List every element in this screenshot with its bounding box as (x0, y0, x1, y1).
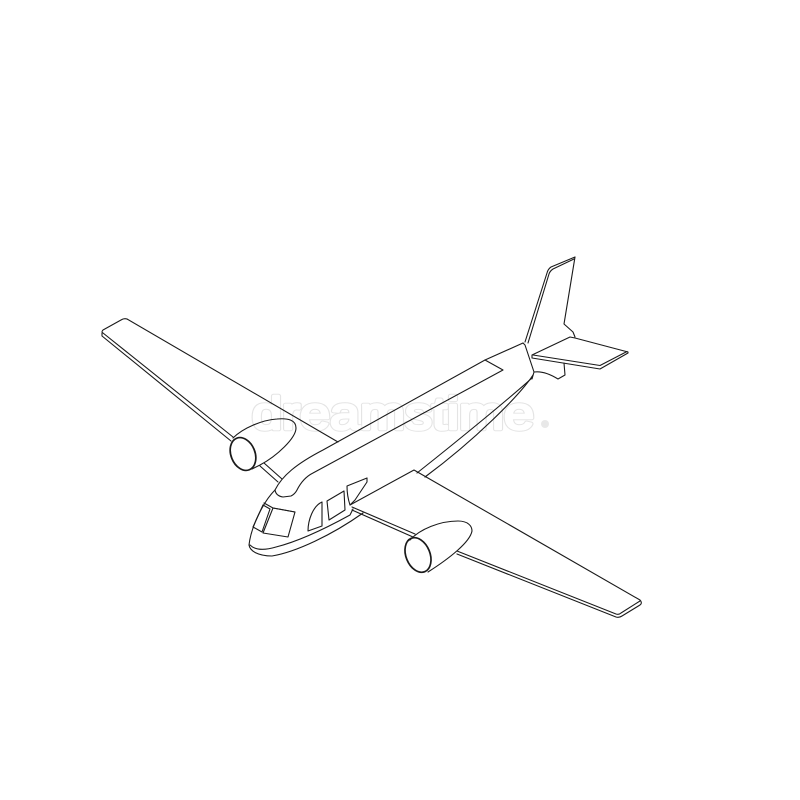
left engine (226, 419, 296, 474)
airplane line art (102, 257, 641, 617)
watermark: dreamstime (252, 388, 534, 439)
cabin window 3 (347, 478, 367, 505)
cabin window 2 (327, 491, 345, 520)
watermark: dreamstime (252, 388, 534, 439)
cockpit front window (263, 508, 295, 537)
right engine (400, 521, 472, 576)
cabin window 1 (308, 502, 322, 531)
tail fin (525, 257, 575, 343)
right wing (350, 470, 641, 617)
fuselage (249, 343, 534, 556)
left wing (102, 319, 338, 482)
horizontal stabilizer (532, 337, 628, 379)
cockpit side window (253, 505, 270, 532)
